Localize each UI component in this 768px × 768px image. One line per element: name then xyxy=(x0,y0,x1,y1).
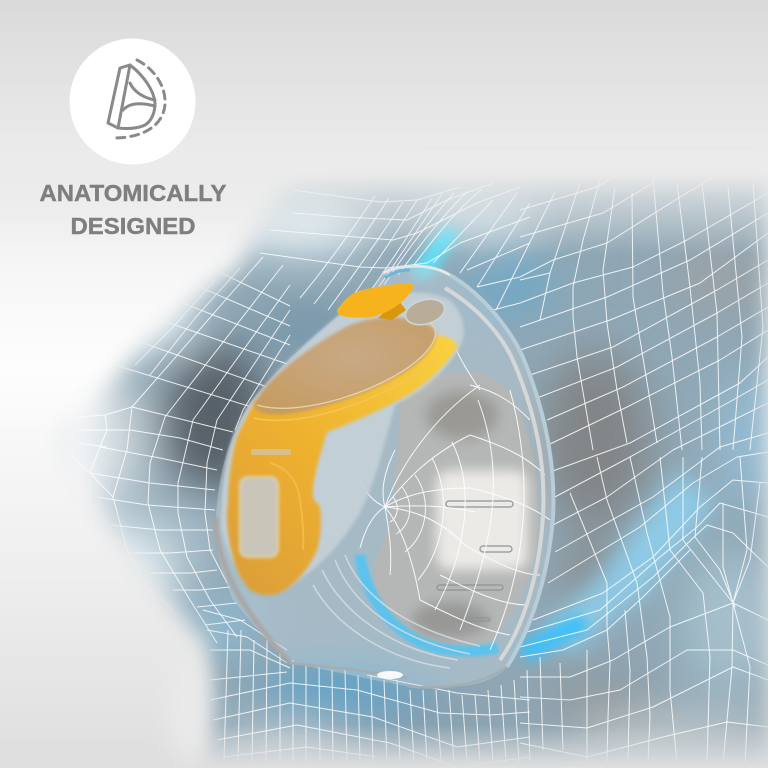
disc ring xyxy=(257,322,436,408)
yellow housing xyxy=(227,335,457,595)
heading xyxy=(40,180,226,239)
shell rim inner xyxy=(445,288,543,660)
bottom mesh xyxy=(203,610,530,767)
inner housing arc xyxy=(270,463,303,550)
flap stem xyxy=(378,300,406,320)
white circle xyxy=(70,38,196,164)
frosted body xyxy=(221,293,464,593)
top fade into background xyxy=(0,150,768,255)
small label bar xyxy=(251,449,291,455)
yellow flap xyxy=(337,283,413,318)
shadow patch in cup xyxy=(426,391,498,439)
light reflection in cup xyxy=(436,470,528,570)
wireframe mesh xyxy=(73,173,768,767)
left cone: descending family xyxy=(90,270,290,625)
cup centre wireframe xyxy=(360,342,550,650)
clear outer shell xyxy=(216,266,553,687)
icon: breast shield xyxy=(108,60,165,138)
top centre mesh xyxy=(260,183,530,310)
lower right mesh xyxy=(520,480,768,757)
right mesh xyxy=(573,177,763,450)
shell rim xyxy=(450,275,553,667)
body shading: blue and grey glow xyxy=(70,180,768,762)
frosted window panel xyxy=(240,477,278,557)
breast shield device xyxy=(216,266,553,687)
bottom clip xyxy=(377,671,403,679)
bottom rim xyxy=(290,663,507,687)
shell top highlight xyxy=(383,266,450,275)
cup lower shadow xyxy=(412,602,488,638)
outer disc ring xyxy=(254,358,438,420)
inner cup xyxy=(374,371,538,650)
heading line 2: DESIGNED xyxy=(70,213,196,239)
heading line 1: ANATOMICALLY xyxy=(40,180,226,206)
top port opening xyxy=(403,295,447,329)
bottom fade into background xyxy=(0,725,768,768)
shell top blue tint xyxy=(385,270,410,278)
tan disc xyxy=(255,318,436,415)
measurement marks xyxy=(437,501,513,621)
bellows ribs xyxy=(313,555,480,668)
icon badge xyxy=(70,38,196,164)
lower left fade into background xyxy=(180,647,223,753)
left rim band xyxy=(216,517,290,663)
blue ring inside shell xyxy=(360,555,498,651)
